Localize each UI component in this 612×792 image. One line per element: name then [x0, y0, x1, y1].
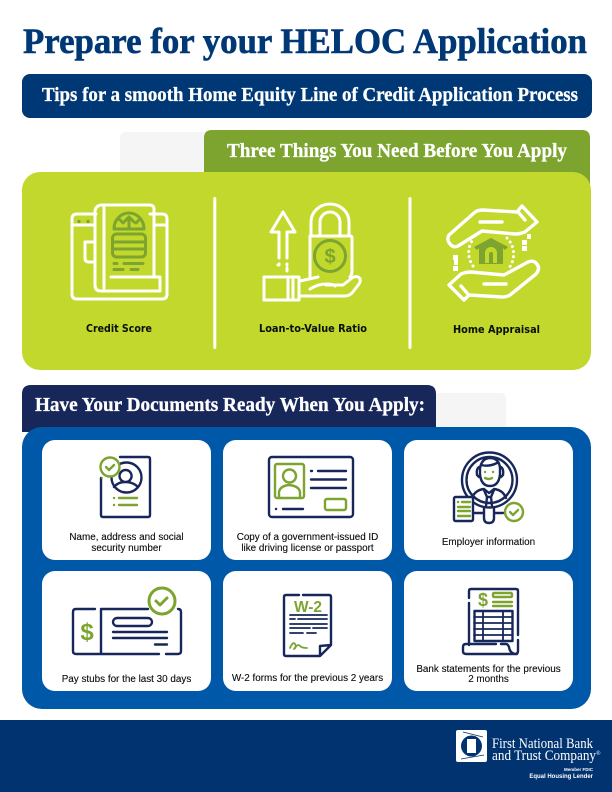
logo text	[492, 736, 601, 780]
subtitle banner	[22, 74, 592, 118]
icon: loan to value: $	[324, 246, 336, 268]
heading tab: documents	[22, 385, 436, 445]
label: 2 months	[468, 674, 509, 685]
icon: bank statement: $	[478, 590, 488, 610]
panel: three things you need	[22, 130, 591, 370]
logo text: First National Bank	[492, 736, 593, 752]
card: w-2 forms	[223, 571, 392, 691]
icon: w-2 form: W-2	[294, 599, 322, 616]
logo text: Equal Housing Lender	[529, 774, 594, 780]
logo text: Member FDIC	[564, 767, 594, 772]
card: employer information	[404, 440, 573, 560]
heading tab: three things: Three Things You Need Before You Apply	[227, 140, 568, 162]
divider left	[213, 197, 216, 349]
lime panel background	[22, 172, 591, 370]
icon: pay stub check	[73, 588, 181, 654]
panel: documents	[22, 385, 591, 709]
card: name, address, ssn	[42, 440, 211, 560]
icon: bank statement	[463, 589, 518, 654]
label: credit score: Credit Score	[86, 323, 152, 335]
blue panel background	[22, 427, 591, 709]
icon: id card	[269, 457, 353, 517]
label: W-2 forms for the previous 2 years	[232, 673, 383, 684]
logo text: and Trust Company	[492, 748, 596, 764]
label: Copy of a government-issued ID	[237, 532, 378, 543]
card: government id	[223, 440, 392, 560]
label: loan to value: Loan-to-Value Ratio	[259, 323, 367, 335]
icon: pay stub check: $	[80, 619, 94, 646]
icon: w-2 form	[284, 595, 331, 656]
divider right	[408, 197, 412, 349]
label: security number	[91, 543, 162, 554]
icon: loan to value	[264, 204, 360, 300]
label: home appraisal: Home Appraisal	[453, 324, 540, 336]
logo text: ®	[596, 750, 601, 757]
label: Bank statements for the previous	[416, 664, 561, 675]
logo mark	[456, 730, 487, 762]
label: like driving license or passport	[241, 543, 374, 554]
label: Pay stubs for the last 30 days	[62, 674, 191, 685]
heading tab: documents: Have Your Documents Ready When You Apply:	[35, 394, 425, 416]
grey tab	[430, 393, 506, 427]
footer band	[0, 720, 612, 792]
card: pay stubs	[42, 571, 211, 691]
label: Name, address and social	[69, 532, 184, 543]
heading tab: three things	[204, 130, 590, 190]
grey tab	[120, 132, 210, 172]
icon: identity document	[100, 457, 150, 517]
card: bank statements	[404, 571, 573, 691]
icon: credit score	[72, 205, 167, 299]
icon: home appraisal	[448, 206, 538, 300]
subtitle banner: Tips for a smooth Home Equity Line of Credit Application Process	[42, 85, 578, 106]
title: Prepare for your HELOC Application	[23, 21, 587, 61]
icon: employer search	[454, 452, 523, 523]
label: Employer information	[442, 537, 535, 548]
